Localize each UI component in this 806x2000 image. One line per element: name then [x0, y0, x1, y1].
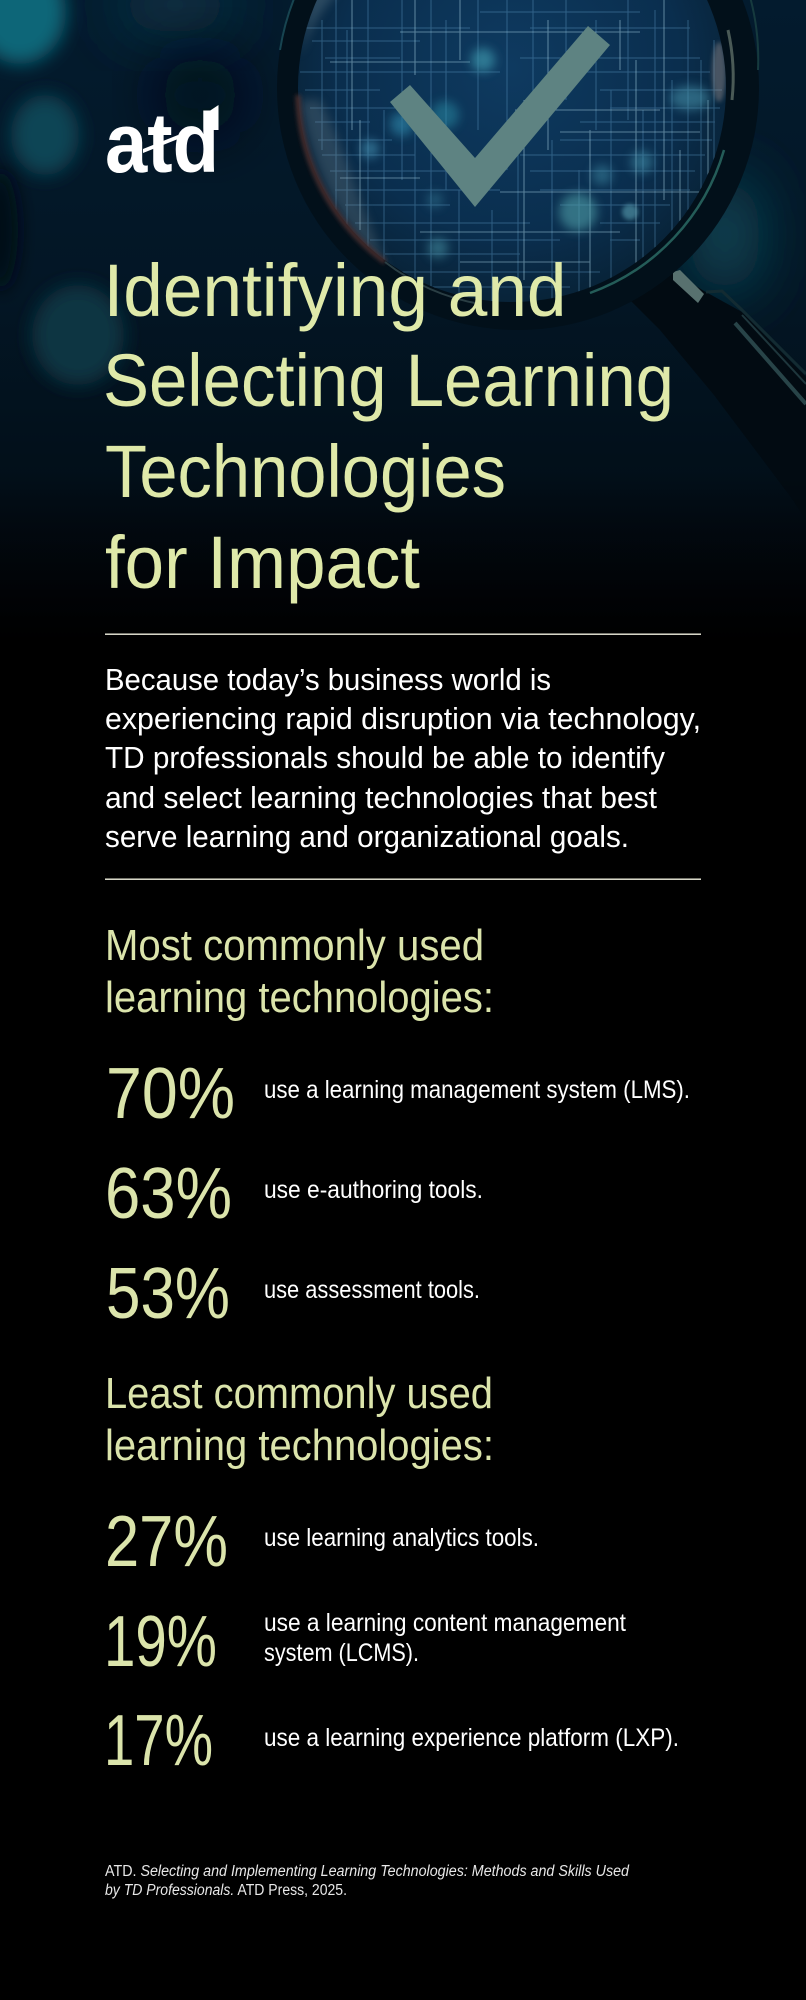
- stat: 70 percent LMS: [106, 1054, 690, 1134]
- hero photo: magnifying glass over a digital grid: [0, 0, 806, 640]
- title: [103, 249, 674, 604]
- heading: least commonly used: Least commonly used: [105, 1369, 493, 1418]
- lens edge reflections: [300, 0, 726, 275]
- stat: 53 percent assessment: [106, 1254, 480, 1334]
- heading: most commonly used: learning technologies:: [105, 973, 494, 1022]
- lens glow nodes: [361, 48, 710, 258]
- intro paragraph: TD professionals should be able to identify: [105, 740, 665, 775]
- stat: 63 percent e-authoring: 63%: [105, 1154, 232, 1234]
- intro paragraph: [105, 662, 701, 854]
- intro paragraph: and select learning technologies that best: [105, 780, 657, 815]
- stat: 70 percent LMS: 70%: [106, 1054, 235, 1134]
- stat: 53 percent assessment: 53%: [106, 1254, 230, 1334]
- heading: most commonly used: [105, 921, 494, 1022]
- source citation: [105, 1863, 630, 1899]
- stat: 27 percent analytics: 27%: [105, 1502, 228, 1582]
- stat: 17 percent LXP: use a learning experience platform (LXP).: [264, 1724, 679, 1752]
- brighter grid lines: [330, 0, 720, 290]
- lens rim highlights: [280, 0, 758, 304]
- photo fade to black: [0, 470, 806, 640]
- title: Identifying and: [104, 249, 566, 332]
- source citation: by TD Professionals. ATD Press, 2025.: [105, 1882, 347, 1899]
- stat: 63 percent e-authoring: use e-authoring tools.: [264, 1176, 483, 1204]
- source citation: ATD. Selecting and Implementing Learning Technologies: Methods and Skills Used: [105, 1863, 630, 1880]
- title: Technologies: [105, 430, 506, 513]
- stat: 17 percent LXP: 17%: [104, 1701, 213, 1781]
- intro paragraph: Because today’s business world is: [105, 662, 551, 697]
- lens grid lines: [300, 0, 722, 302]
- stat: 19 percent LCMS: [104, 1602, 626, 1682]
- stat: 19 percent LCMS: use a learning content management: [264, 1609, 626, 1637]
- stat: 70 percent LMS: use a learning management system (LMS).: [264, 1076, 690, 1104]
- stat: 27 percent analytics: [105, 1502, 539, 1582]
- intro paragraph: serve learning and organizational goals.: [105, 819, 629, 854]
- stat: 19 percent LCMS: 19%: [104, 1602, 217, 1682]
- magnifying glass lens: [290, 0, 730, 310]
- stat: 63 percent e-authoring: [105, 1154, 483, 1234]
- bokeh background lights: [0, 0, 761, 385]
- magnifying glass handle: [630, 270, 806, 520]
- heading: most commonly used: Most commonly used: [105, 921, 484, 970]
- title: for Impact: [105, 521, 420, 604]
- logo: atd: atd: [105, 96, 219, 190]
- intro paragraph: experiencing rapid disruption via technology,: [105, 701, 701, 736]
- magnifying glass ring: [277, 0, 759, 330]
- divider top: [105, 634, 701, 635]
- stat: 27 percent analytics: use learning analytics tools.: [264, 1524, 539, 1552]
- stat: 17 percent LXP: [104, 1701, 679, 1781]
- heading: least commonly used: learning technologies:: [105, 1421, 494, 1470]
- checkmark in the lens: [390, 26, 610, 207]
- divider bottom: [105, 878, 701, 880]
- stat: 19 percent LCMS: system (LCMS).: [264, 1639, 419, 1667]
- title: Selecting Learning: [103, 339, 674, 422]
- stat: 53 percent assessment: use assessment tools.: [264, 1276, 480, 1304]
- heading: least commonly used: [105, 1369, 494, 1470]
